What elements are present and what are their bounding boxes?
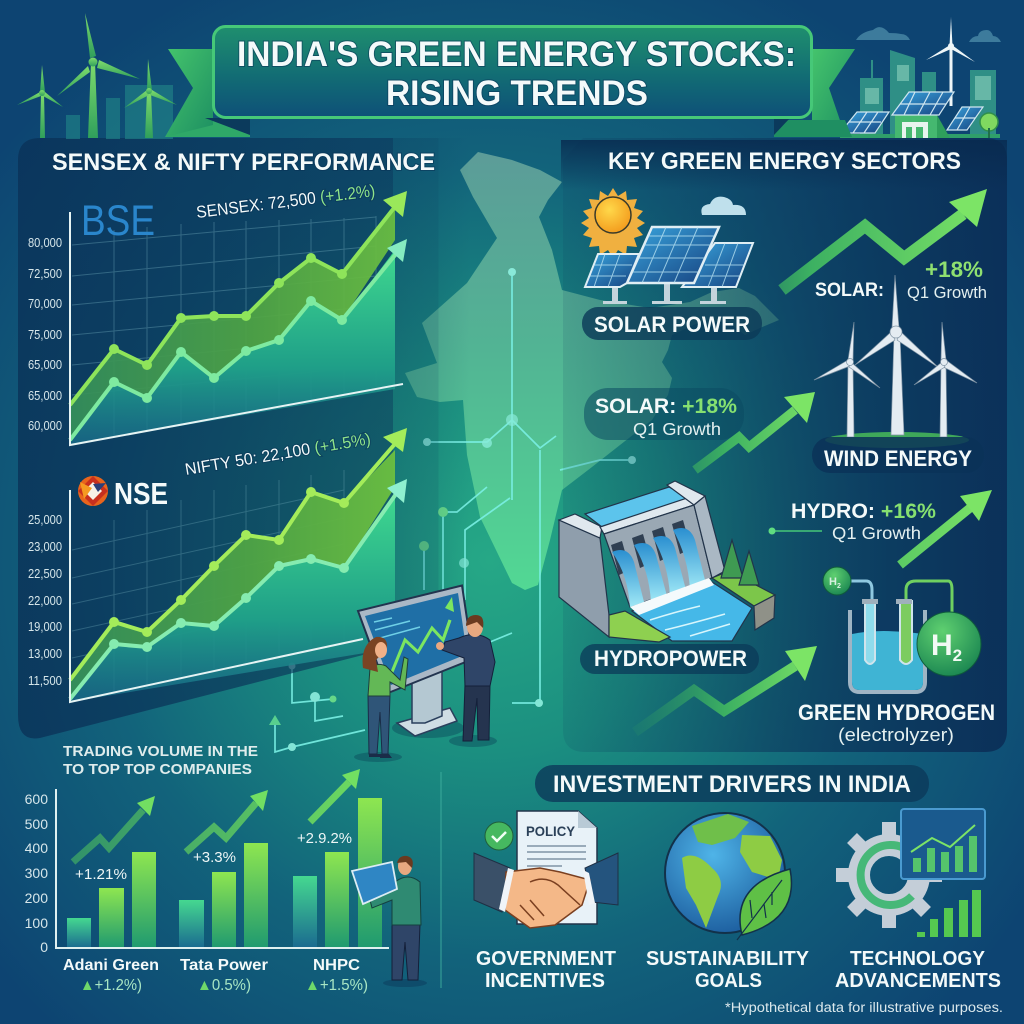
y axis labels <box>25 791 48 955</box>
arrowheads <box>383 428 407 503</box>
bar chart: trading volume <box>25 769 389 994</box>
y axis labels: 23,000 <box>28 540 62 554</box>
label: green hydrogen: (electrolyzer) <box>838 725 954 745</box>
top-right city, turbine and solar house <box>840 17 1001 138</box>
display stand <box>397 670 457 736</box>
icon: sun <box>581 188 645 258</box>
y axis labels: 70,000 <box>28 297 62 311</box>
heading: sensex and nifty performance: SENSEX & NIFTY PERFORMANCE <box>52 149 435 176</box>
label: wind energy <box>812 437 984 473</box>
icon: government incentives <box>474 811 618 928</box>
icon: green hydrogen electrolyzer: H <box>829 576 837 588</box>
y axis labels: 11,500 <box>28 674 62 688</box>
y axis labels: 500 <box>25 816 48 832</box>
person with tablet <box>352 856 427 987</box>
title banner <box>165 26 855 137</box>
sector: solar power <box>581 188 762 340</box>
logo: nse: NSE <box>114 476 168 511</box>
sensex value label: SENSEX: 72,500 (+1.2%) <box>195 181 376 222</box>
company changes: ▲0.5%) <box>197 977 251 994</box>
change labels <box>75 831 352 883</box>
handshake <box>474 853 510 912</box>
area fills <box>70 450 395 699</box>
person: man <box>436 615 495 741</box>
company changes <box>80 977 368 994</box>
y axis labels: 25,000 <box>28 513 62 527</box>
area fills <box>70 205 395 440</box>
y axis labels: 22,000 <box>28 594 62 608</box>
company names <box>63 957 360 974</box>
logo: nse <box>78 476 168 511</box>
heading: investment drivers <box>535 765 929 802</box>
label: hydropower: HYDROPOWER <box>594 646 747 671</box>
callout: solar growth left: Q1 Growth <box>633 419 721 439</box>
people at trading display <box>354 586 497 762</box>
chart: nifty <box>28 428 407 702</box>
callout: hydro growth: HYDRO: +16% <box>791 500 936 523</box>
title text: RISING TRENDS <box>386 74 648 113</box>
y axis labels: 65,000 <box>28 389 62 403</box>
label: solar power <box>582 307 762 340</box>
label: green hydrogen <box>798 700 995 745</box>
sensex lines <box>70 208 394 405</box>
icon: cloud <box>701 197 746 215</box>
label: sustainability goals <box>646 947 809 992</box>
top-left turbines and skyline <box>17 13 177 139</box>
company names: NHPC <box>313 957 360 974</box>
change labels: +1.21% <box>75 867 127 883</box>
policy document <box>517 811 597 924</box>
logo: bse: BSE <box>81 197 155 245</box>
y axis labels: 400 <box>25 840 48 856</box>
label: technology advancements: ADVANCEMENTS <box>835 969 1001 992</box>
heading: trading volume: TO TOP TOP COMPANIES <box>63 761 252 778</box>
icon: wind turbines <box>814 275 977 448</box>
display screen <box>358 586 473 693</box>
icon: technology gear and dashboard <box>836 809 985 937</box>
grid <box>72 216 376 436</box>
person: woman <box>363 637 408 758</box>
y axis labels: 60,000 <box>28 419 62 433</box>
callout: solar growth right: +18% <box>925 257 983 282</box>
callout: hydro growth <box>768 500 936 543</box>
axes <box>70 490 363 702</box>
y axis labels: 22,500 <box>28 567 62 581</box>
chart: sensex <box>28 181 407 445</box>
icon: green hydrogen electrolyzer: 2 <box>837 583 841 590</box>
label: technology advancements <box>835 947 1001 992</box>
heading: key green energy sectors: KEY GREEN ENERGY SECTORS <box>608 148 961 175</box>
callout: solar growth right: SOLAR: <box>815 280 884 301</box>
y axis labels: 200 <box>25 890 48 906</box>
growth arrow: bottom <box>635 646 817 732</box>
icon: green hydrogen electrolyzer <box>823 567 981 692</box>
label: sustainability goals: GOALS <box>695 969 762 992</box>
label: solar power: SOLAR POWER <box>594 312 750 337</box>
company names: Tata Power <box>180 957 268 974</box>
axes <box>70 212 403 445</box>
heading: trading volume: TRADING VOLUME IN THE <box>63 743 258 760</box>
label: government incentives <box>476 947 616 992</box>
y axis labels: 72,500 <box>28 267 62 281</box>
arrowheads <box>383 191 407 262</box>
check badge <box>485 822 513 850</box>
axes <box>56 789 389 948</box>
footnote: *Hypothetical data for illustrative purposes. <box>725 1000 1003 1015</box>
callout: solar growth right <box>815 257 987 302</box>
growth bars <box>917 890 981 937</box>
grid <box>72 470 344 694</box>
y axis labels: 600 <box>25 791 48 807</box>
y axis labels: 300 <box>25 865 48 881</box>
bars <box>67 798 382 948</box>
leaf <box>737 869 791 940</box>
heading: investment drivers: INVESTMENT DRIVERS IN INDIA <box>553 771 911 798</box>
heading: trading volume <box>63 743 258 778</box>
panel: sensex and nifty background <box>18 138 470 739</box>
growth arrow: middle <box>695 392 815 470</box>
title text: INDIA'S GREEN ENERGY STOCKS: <box>237 35 796 74</box>
callout: solar growth right: Q1 Growth <box>907 283 987 302</box>
callout: solar growth left <box>584 388 744 440</box>
y axis labels <box>28 236 62 433</box>
y axis labels: 0 <box>40 939 48 955</box>
icon: hydropower dam <box>559 481 775 642</box>
label: government incentives: GOVERNMENT <box>476 947 616 970</box>
shadows <box>354 718 497 762</box>
trend arrows <box>73 782 349 862</box>
nifty value label: NIFTY 50: 22,100 (+1.5%) <box>184 430 372 479</box>
y axis labels: 65,000 <box>28 358 62 372</box>
y axis labels <box>28 513 62 688</box>
heading band decor <box>561 140 1007 190</box>
monitor <box>901 809 985 879</box>
icon: government incentives: POLICY <box>526 823 576 839</box>
title text <box>237 35 796 113</box>
label: technology advancements: TECHNOLOGY <box>850 947 985 970</box>
change labels: +2.9.2% <box>297 831 352 847</box>
india map <box>405 152 779 590</box>
company changes: ▲+1.5%) <box>305 977 368 994</box>
icon: solar panels <box>585 227 753 304</box>
growth arrow: hydro <box>900 490 992 565</box>
icon: green hydrogen electrolyzer: H <box>931 629 953 662</box>
data markers <box>109 487 349 637</box>
y axis labels: 19,000 <box>28 620 62 634</box>
gear <box>836 822 942 928</box>
label: green hydrogen: GREEN HYDROGEN <box>798 700 995 725</box>
company changes: ▲+1.2%) <box>80 977 142 994</box>
y axis labels: 75,000 <box>28 328 62 342</box>
label: wind energy: WIND ENERGY <box>824 446 972 471</box>
vertical divider <box>440 772 442 988</box>
growth arrow: top <box>782 189 987 290</box>
panel: key sectors background <box>563 138 1007 752</box>
data markers <box>109 253 347 370</box>
icon: green hydrogen electrolyzer: 2 <box>953 646 962 665</box>
nifty lines <box>70 445 394 680</box>
circuit network lines <box>269 268 636 752</box>
arrowheads <box>137 769 360 816</box>
company names: Adani Green <box>63 957 159 974</box>
screen chart <box>365 593 467 685</box>
y axis labels: 80,000 <box>28 236 62 250</box>
change labels: +3.3% <box>193 850 236 866</box>
y axis labels: 13,000 <box>28 647 62 661</box>
icon: globe with leaf <box>665 813 791 940</box>
label: government incentives: INCENTIVES <box>485 969 605 992</box>
callout: solar growth left: SOLAR: +18% <box>595 395 737 418</box>
callout: hydro growth: Q1 Growth <box>832 523 921 543</box>
label: sustainability goals: SUSTAINABILITY <box>646 947 809 970</box>
y axis labels: 100 <box>25 915 48 931</box>
